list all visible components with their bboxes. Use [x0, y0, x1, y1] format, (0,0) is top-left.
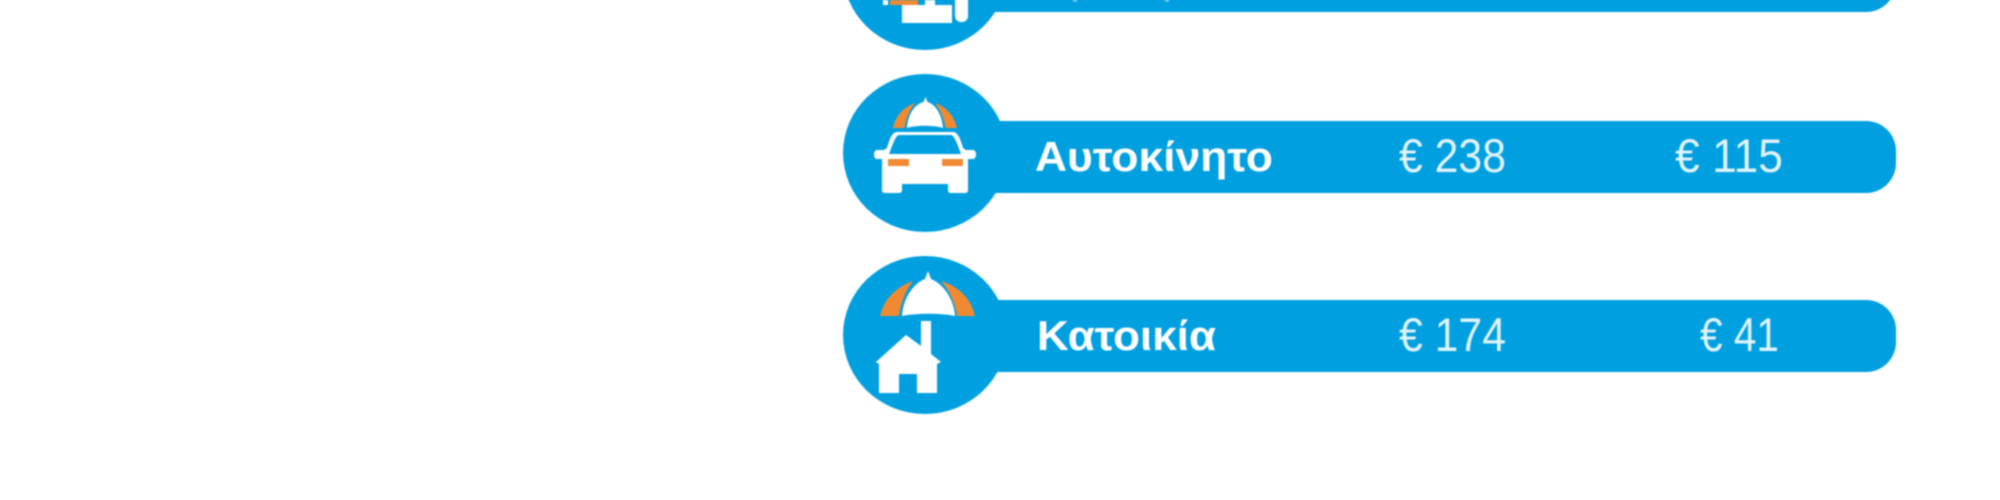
row 1 bar — [925, 0, 1896, 12]
row 3 bar — [925, 300, 1896, 372]
value: home second column: € 41 — [1700, 308, 1779, 361]
value: home first column: € 174 — [1399, 308, 1506, 361]
row 2 bar — [925, 121, 1896, 193]
row 2 circle — [843, 74, 1007, 232]
row 3: home insurance — [843, 256, 1896, 414]
icon: house under umbrella — [876, 271, 975, 393]
value: car first column: € 238 — [1399, 129, 1506, 182]
row 3 circle — [843, 256, 1007, 414]
row 2: car insurance — [843, 74, 1896, 232]
value: car second column: € 115 — [1675, 129, 1783, 182]
label: car: Αυτοκίνητο — [1035, 133, 1273, 180]
icon: partly visible document and roll — [883, 0, 968, 23]
descender marks of clipped label — [1073, 0, 1169, 2]
icon: car under umbrella — [874, 97, 976, 193]
row 1 circle — [843, 0, 1007, 50]
label: home: Κατοικία — [1037, 312, 1216, 359]
row 1: clipped top row — [843, 0, 1896, 50]
